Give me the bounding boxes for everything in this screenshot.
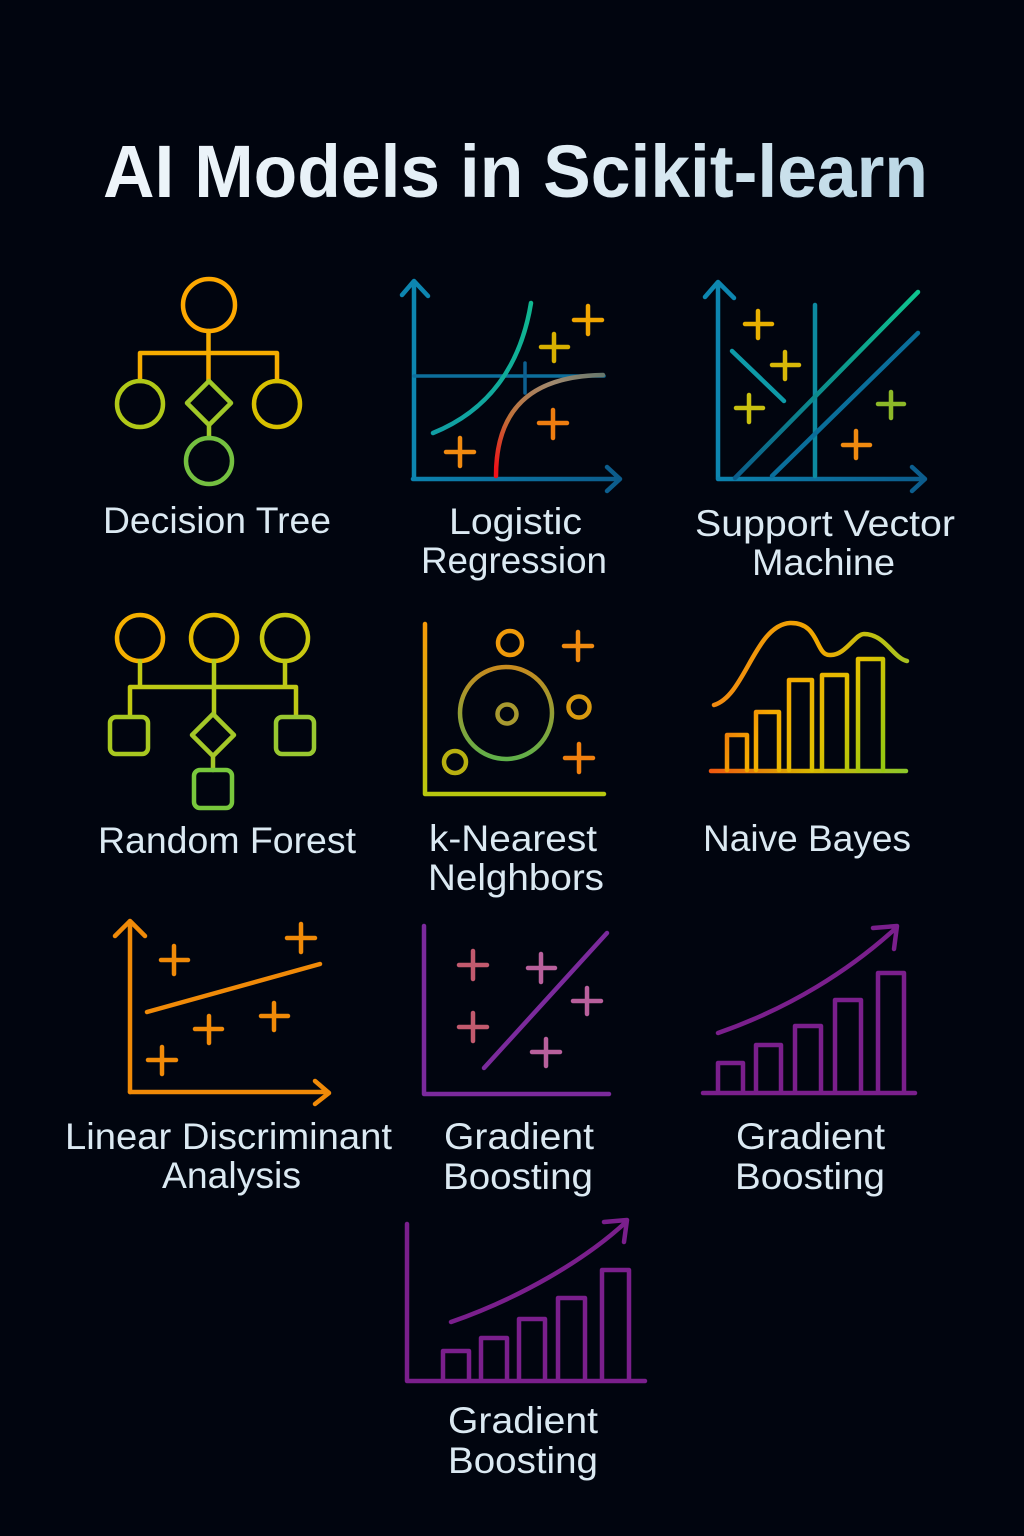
label: logistic regression: Regression	[421, 539, 607, 581]
label: random forest: Random Forest	[98, 819, 357, 861]
label: linear discriminant analysis: Analysis	[162, 1154, 301, 1196]
label: gradient boosting 2: Boosting	[735, 1155, 885, 1197]
icon: gradient boosting bars	[703, 926, 915, 1093]
label: linear discriminant analysis	[65, 1115, 393, 1196]
label: decision tree: Decision Tree	[103, 499, 331, 541]
icon: gradient boosting scatter	[424, 926, 609, 1094]
icon: logistic regression	[402, 281, 620, 491]
icon: k-nearest neighbors	[425, 624, 604, 794]
label: k-nearest neighbors: k-Nearest	[429, 817, 598, 859]
label: gradient boosting 3: Gradient	[448, 1399, 599, 1441]
title: AI Models in Scikit-learn	[103, 130, 928, 213]
label: k-nearest neighbors	[428, 817, 604, 898]
label: naive bayes: Naive Bayes	[703, 817, 911, 859]
label: k-nearest neighbors: Nelghbors	[428, 856, 604, 898]
label: gradient boosting 1	[443, 1115, 595, 1197]
label: gradient boosting 3	[448, 1399, 599, 1481]
label: gradient boosting 3: Boosting	[448, 1439, 598, 1481]
icon: gradient boosting axis bars	[407, 1220, 645, 1381]
label: gradient boosting 2: Gradient	[736, 1115, 886, 1157]
label: support vector machine: Support Vector	[695, 502, 955, 544]
label: logistic regression	[421, 500, 607, 581]
icon: naive bayes	[711, 623, 907, 771]
label: support vector machine	[695, 502, 955, 583]
icon: support vector machine	[705, 282, 925, 491]
label: gradient boosting 1: Boosting	[443, 1155, 593, 1197]
label: support vector machine: Machine	[752, 541, 895, 583]
label: linear discriminant analysis: Linear Discriminant	[65, 1115, 393, 1157]
icon: random forest	[110, 615, 314, 808]
icon: linear discriminant analysis	[115, 921, 329, 1104]
label: gradient boosting 1: Gradient	[444, 1115, 595, 1157]
icon: decision tree	[117, 279, 300, 484]
label: gradient boosting 2	[735, 1115, 886, 1197]
label: logistic regression: Logistic	[449, 500, 582, 542]
